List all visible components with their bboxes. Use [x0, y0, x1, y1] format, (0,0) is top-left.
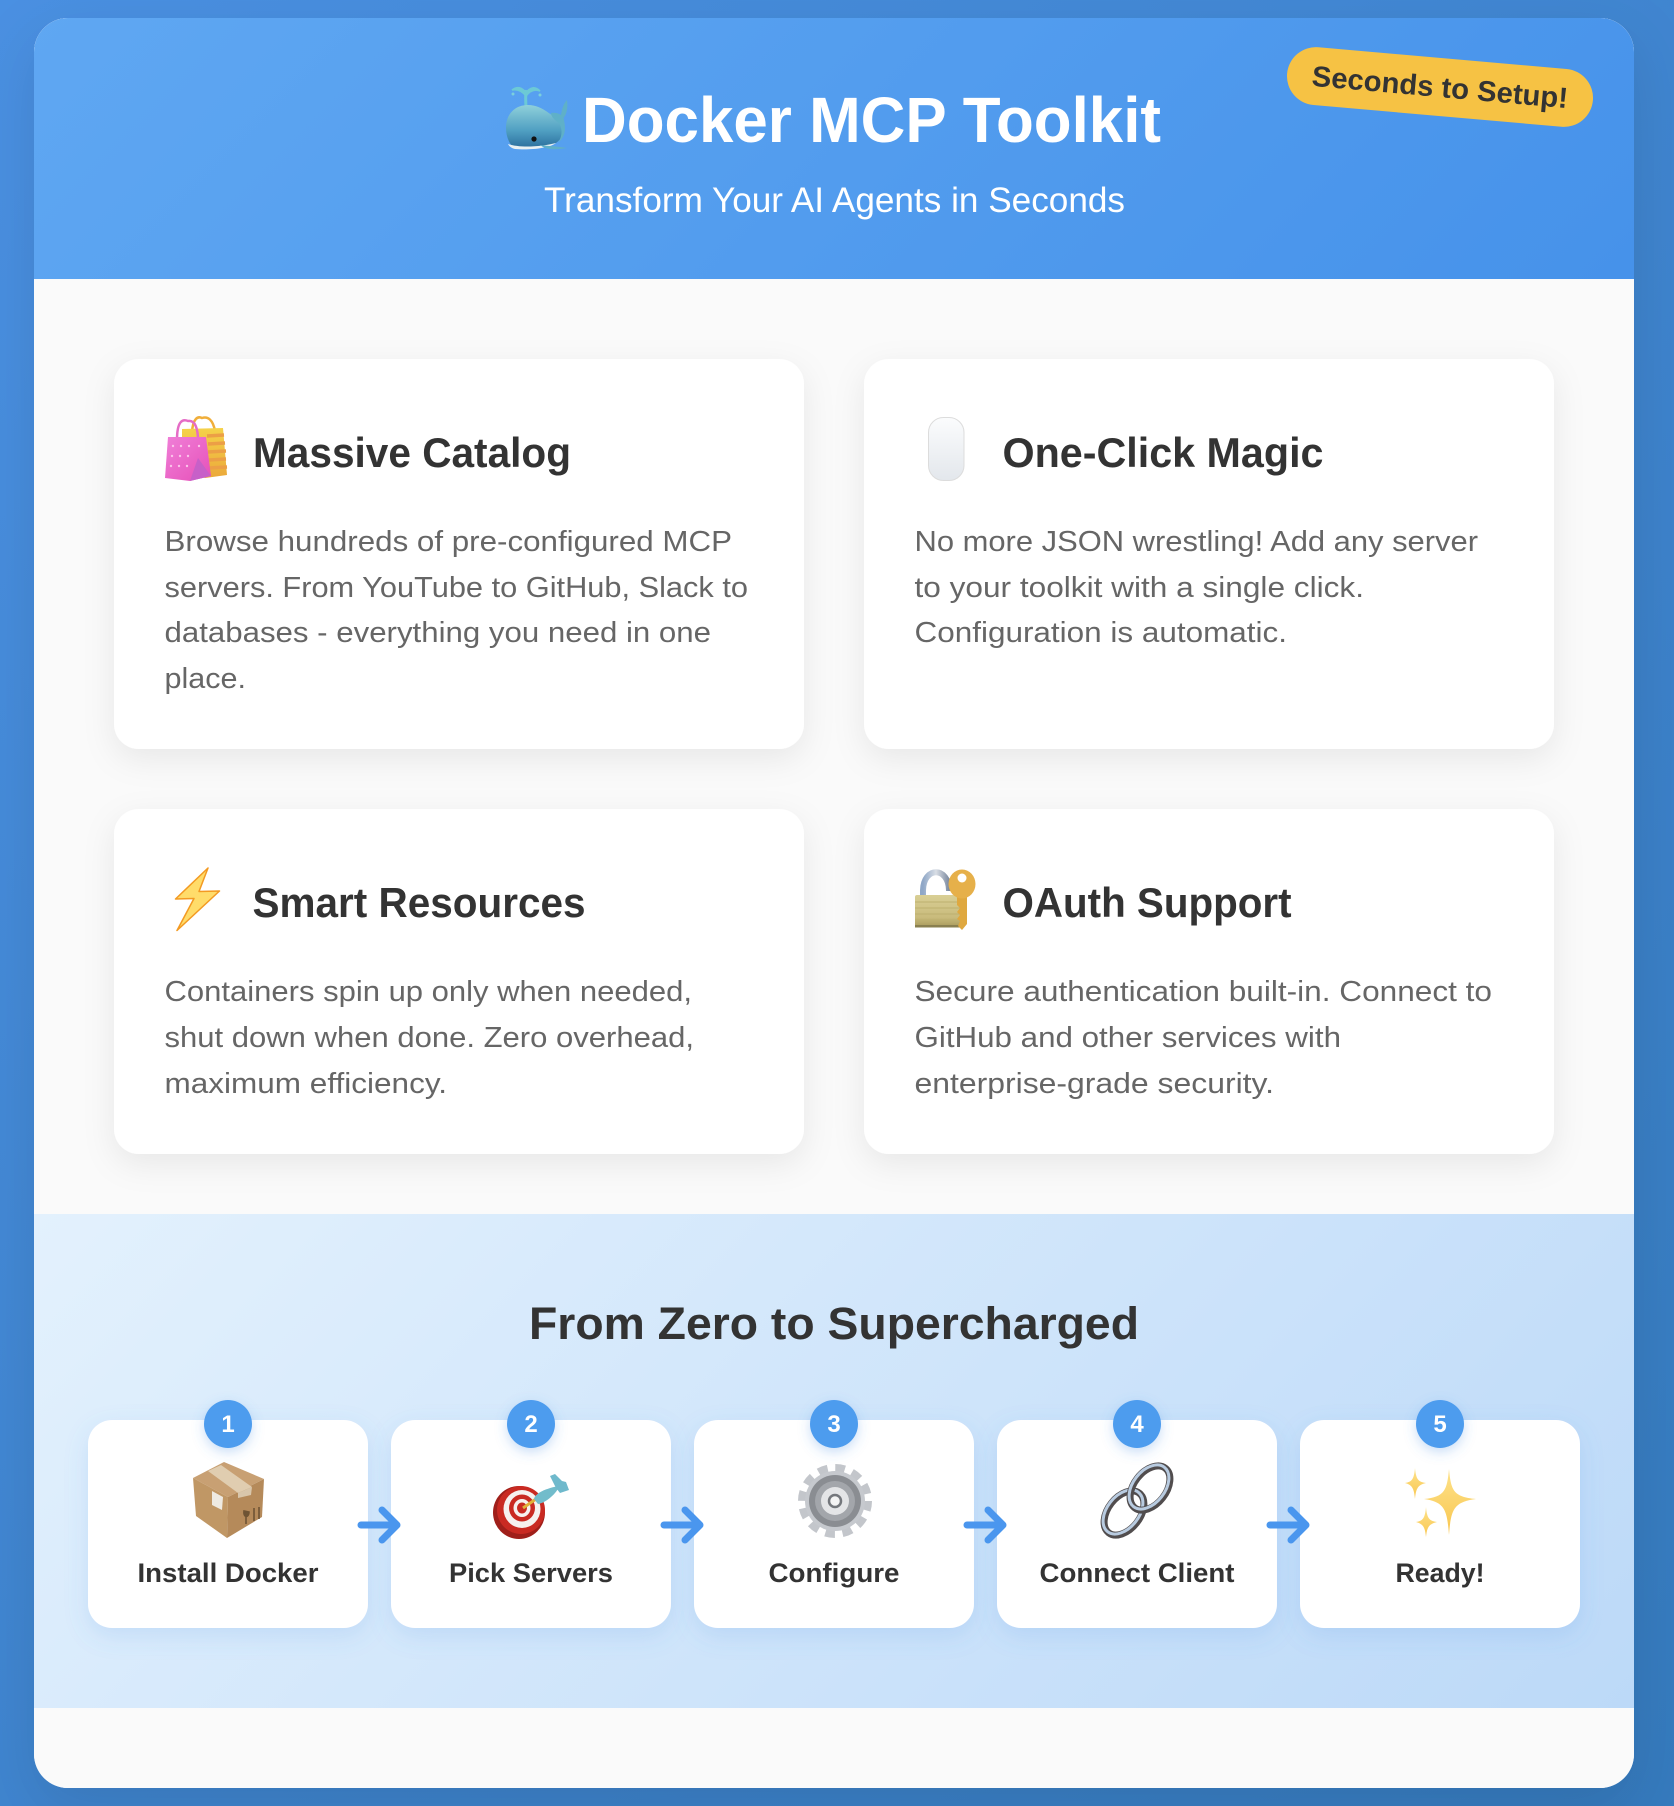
panel: smart resources: [114, 809, 804, 1154]
step number: [507, 1400, 555, 1448]
description: Secure authentication built-in. Connect to: [914, 976, 1492, 1008]
step number: 1: [221, 1411, 235, 1438]
badge: seconds to setup: Seconds to Setup!: [1311, 61, 1569, 115]
subtitle: Transform Your AI Agents in Seconds: [544, 181, 1125, 220]
arrow: step 1 to 2: [361, 1510, 397, 1540]
icon: target with dart: [493, 1474, 569, 1539]
badge: seconds to setup: [1285, 45, 1595, 129]
description: GitHub and other services with: [914, 1022, 1341, 1054]
step 3: configure: [694, 1400, 974, 1628]
description: Browse hundreds of pre-configured MCP: [164, 526, 732, 558]
icon: lock with key: [915, 870, 976, 930]
step 4: connect client: [997, 1400, 1277, 1628]
description: [914, 526, 1478, 649]
step number: [1113, 1400, 1161, 1448]
panel: oauth support: [864, 809, 1554, 1154]
heading: OAuth Support: [1002, 879, 1292, 926]
icon: whale: [506, 88, 567, 149]
description: [164, 526, 748, 695]
step label: Configure: [768, 1558, 900, 1588]
step number: [204, 1400, 252, 1448]
step label: Pick Servers: [449, 1558, 613, 1588]
description: maximum efficiency.: [164, 1068, 447, 1100]
panel: one-click magic: [864, 359, 1554, 749]
arrow: step 4 to 5: [1270, 1510, 1306, 1540]
icon: gear: [802, 1468, 868, 1534]
heading: Smart Resources: [252, 879, 586, 926]
icon: chain links: [1095, 1457, 1178, 1543]
description: enterprise-grade security.: [914, 1068, 1274, 1100]
step label: Connect Client: [1040, 1558, 1234, 1588]
description: databases - everything you need in one: [164, 617, 711, 649]
step number: 3: [827, 1411, 841, 1438]
description: place.: [164, 663, 246, 695]
step number: 5: [1433, 1411, 1447, 1438]
arrow: step 2 to 3: [664, 1510, 700, 1540]
icon: shopping bags: [165, 417, 227, 481]
step number: 4: [1130, 1411, 1144, 1438]
title: Docker MCP Toolkit: [582, 84, 1161, 156]
description: servers. From YouTube to GitHub, Slack to: [164, 572, 748, 604]
icon: lightning bolt: [176, 868, 220, 930]
section heading: From Zero to Supercharged: [529, 1298, 1139, 1349]
heading: Massive Catalog: [253, 429, 571, 476]
header band: [34, 18, 1634, 279]
panel: massive catalog: [114, 359, 804, 749]
description: shut down when done. Zero overhead,: [164, 1022, 694, 1054]
description: [164, 976, 694, 1100]
description: to your toolkit with a single click.: [914, 572, 1364, 604]
step label: Install Docker: [138, 1558, 319, 1588]
icon: package: [193, 1462, 264, 1538]
description: No more JSON wrestling! Add any server: [914, 526, 1478, 558]
description: [914, 976, 1492, 1100]
step 2: pick servers: [391, 1400, 671, 1628]
icon: sparkles: [1405, 1468, 1476, 1537]
arrow: step 3 to 4: [967, 1510, 1003, 1540]
step label: Ready!: [1396, 1558, 1484, 1588]
description: Configuration is automatic.: [914, 617, 1287, 649]
step number: 2: [524, 1411, 538, 1438]
description: Containers spin up only when needed,: [164, 976, 692, 1008]
panel: workflow section: [34, 1214, 1634, 1708]
step 5: ready: [1300, 1400, 1580, 1628]
step number: [1416, 1400, 1464, 1448]
step 1: install docker: [88, 1400, 368, 1628]
step number: [810, 1400, 858, 1448]
heading: One-Click Magic: [1002, 429, 1324, 476]
icon: mouse: [928, 418, 964, 480]
